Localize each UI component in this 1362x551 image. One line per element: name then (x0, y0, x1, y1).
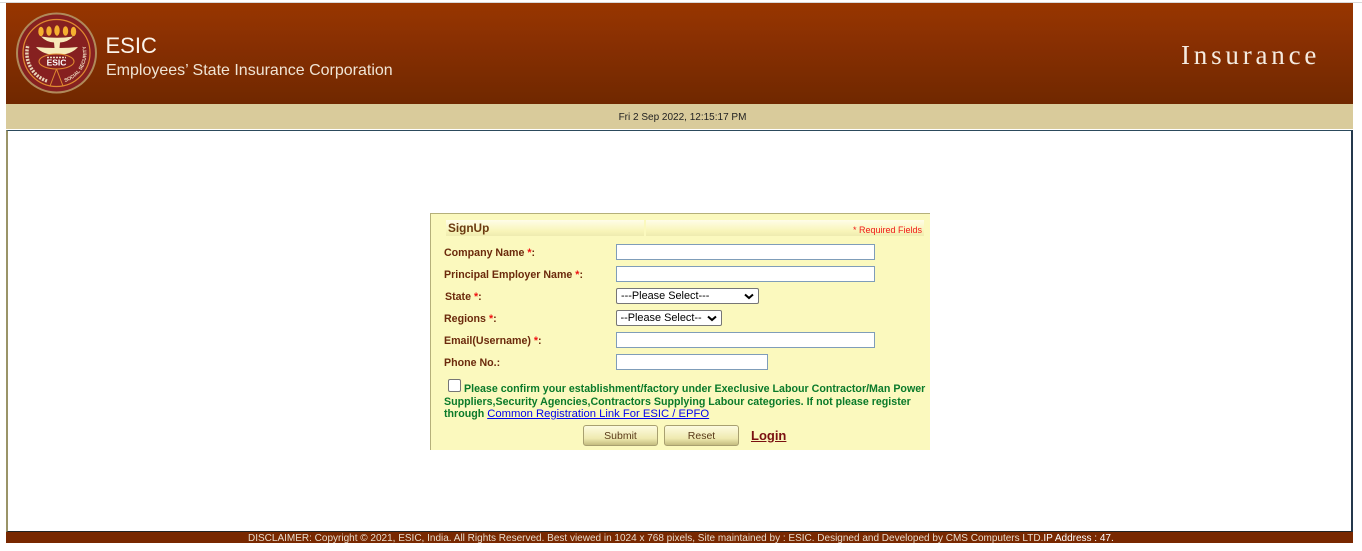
footer disclaimer (6, 532, 1353, 543)
select: state: ---Please Select--- (621, 290, 709, 302)
confirmation text: Please confirm your establishment/factory under Execlusive Labour Contractor/Man Power (464, 383, 925, 395)
section title: Insurance: Insurance (1181, 40, 1320, 70)
confirmation text: Suppliers,Security Agencies,Contractors Supplying Labour categories. If not please register (444, 396, 911, 408)
input: company name (616, 244, 875, 260)
select: regions: --Please Select-- (620, 312, 702, 324)
button: reset: Reset (688, 430, 715, 442)
icon: ESIC logo: ESIC (47, 58, 66, 68)
date bar background (6, 104, 1353, 129)
link: login: Login (751, 428, 786, 443)
button: reset (664, 425, 739, 446)
label: phone: Phone No.: (444, 357, 500, 369)
required fields strip (646, 220, 924, 236)
organisation acronym: ESIC (106, 33, 157, 58)
date bar: Fri 2 Sep 2022, 12:15:17 PM (619, 112, 746, 123)
label: state: State *: (445, 291, 482, 303)
button: submit: Submit (604, 430, 637, 442)
select: regions (616, 310, 722, 326)
main content frame (6, 130, 1353, 532)
checkbox (448, 379, 461, 392)
input: phone (616, 354, 768, 370)
header banner (6, 3, 1353, 104)
label: principal employer: Principal Employer Name *: (444, 269, 583, 281)
icon: ESIC logo (16, 12, 97, 94)
panel: signup form (430, 213, 930, 450)
button: submit (583, 425, 658, 446)
input: email (616, 332, 875, 348)
signup heading strip: SignUp (448, 221, 489, 235)
icon: ESIC logo: SOCIAL SECURITY (64, 46, 86, 82)
select: state (616, 288, 759, 304)
label: email: Email(Username) *: (444, 335, 542, 347)
confirmation text (444, 383, 926, 420)
signup heading strip (446, 220, 644, 236)
top hairline (0, 2, 1362, 3)
label: regions: Regions *: (444, 313, 497, 325)
input: principal employer (616, 266, 875, 282)
required fields strip: * Required Fields (853, 225, 922, 235)
label: company name: Company Name *: (444, 247, 535, 259)
organisation name: Employees’ State Insurance Corporation (106, 62, 393, 79)
confirmation text: through Common Registration Link For ESIC / EPFO (444, 408, 709, 420)
